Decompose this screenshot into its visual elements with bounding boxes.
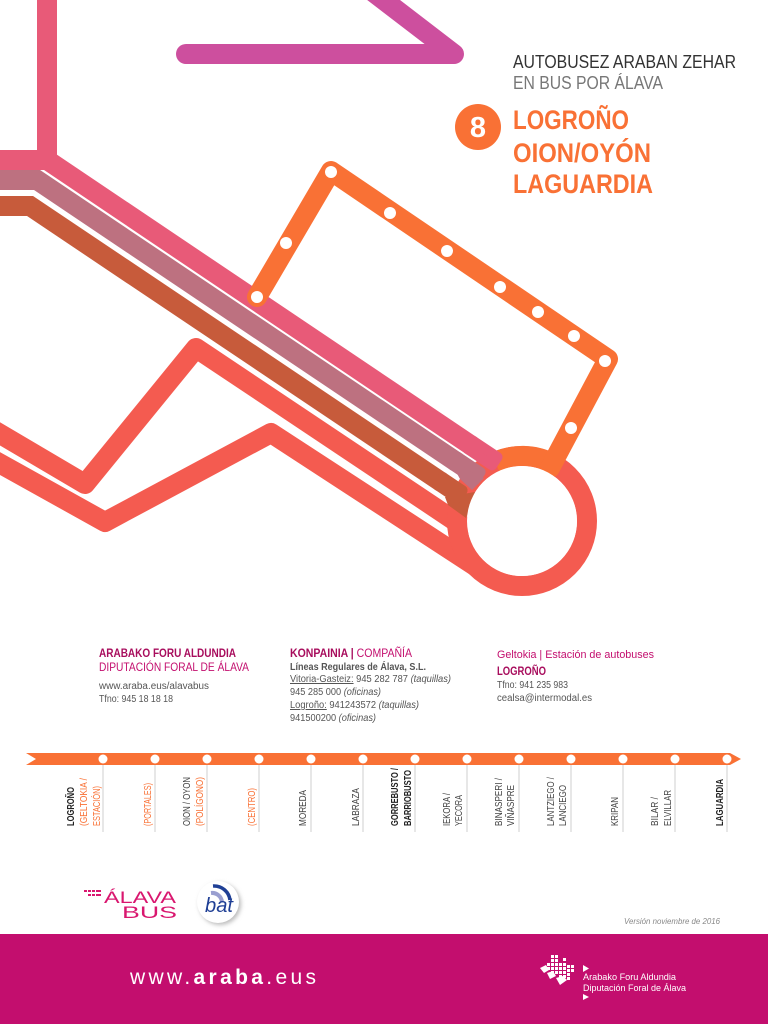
stop labels: (CENTRO) bbox=[246, 788, 258, 826]
line number badge: 8 bbox=[470, 112, 486, 144]
route: magenta line bbox=[186, 0, 454, 54]
contact: company: Líneas Regulares de Álava, S.L. bbox=[290, 660, 426, 673]
terminal ring orange arc bbox=[495, 456, 552, 463]
stop labels bbox=[64, 768, 726, 826]
timeline bbox=[26, 753, 741, 832]
contact: company: 941500200 (oficinas) bbox=[290, 713, 376, 724]
stop labels: OION / OYON bbox=[181, 777, 193, 826]
stop labels: (GELTOKIA / bbox=[78, 778, 90, 826]
contact: company: Logroño: 941243572 (taquillas) bbox=[290, 700, 419, 711]
route name: LOGROÑO bbox=[513, 104, 629, 135]
stop labels: YECORA bbox=[453, 795, 465, 826]
contact: Diputación: ARABAKO FORU ALDUNDIA bbox=[99, 646, 236, 660]
route name: OION/OYÓN bbox=[513, 137, 651, 168]
logo: Álava Bus bbox=[84, 888, 177, 922]
stop labels: BARRIOBUSTO bbox=[402, 770, 414, 826]
stop labels: KRIPAN bbox=[609, 797, 621, 826]
stop labels: ELVILLAR bbox=[662, 790, 674, 826]
title: Spanish line: EN BUS POR ÁLAVA bbox=[513, 73, 663, 93]
contact: station bbox=[497, 649, 654, 704]
contact: station: Tfno: 941 235 983 bbox=[497, 680, 568, 691]
terminal ring bbox=[457, 456, 587, 586]
contact: Diputación: Tfno: 945 18 18 18 bbox=[99, 694, 173, 705]
logo: Álava Bus: ÁLAVA bbox=[104, 888, 177, 907]
orange loop stops bbox=[251, 166, 611, 434]
route: red upper line bbox=[0, 348, 470, 531]
contact: Diputación bbox=[98, 646, 249, 705]
contact: station: cealsa@intermodal.es bbox=[497, 693, 592, 704]
footer band bbox=[0, 934, 768, 1024]
contact: company: KONPAINIA | COMPAÑÍA bbox=[290, 645, 412, 660]
stop labels: LABRAZA bbox=[350, 788, 362, 826]
contact: station: LOGROÑO bbox=[497, 663, 546, 678]
line number badge bbox=[455, 104, 501, 150]
stop labels: ESTACIÓN) bbox=[90, 786, 103, 826]
stop labels: LAGUARDIA bbox=[714, 779, 726, 826]
stop labels: LOGROÑO bbox=[64, 787, 77, 826]
contact: company: 945 285 000 (oficinas) bbox=[290, 687, 381, 698]
stop labels: MOREDA bbox=[297, 790, 309, 826]
logo: bat: bat bbox=[205, 895, 234, 917]
route name: LAGUARDIA bbox=[513, 169, 653, 199]
contact: Diputación: www.araba.eus/alavabus bbox=[98, 681, 209, 692]
footer website: www.araba.eus bbox=[129, 966, 316, 989]
route: orange loop bbox=[257, 171, 608, 468]
version note: Versión noviembre de 2016 bbox=[624, 916, 720, 926]
contact: company: Vitoria-Gasteiz: 945 282 787 (taquillas) bbox=[290, 674, 451, 685]
route name bbox=[513, 104, 653, 199]
stop labels: LANTZIEGO / bbox=[545, 777, 557, 826]
route: pink line bbox=[0, 0, 498, 465]
logo: Álava Bus: BUS bbox=[122, 903, 177, 922]
stop labels: BINASPERI / bbox=[493, 778, 505, 826]
stop labels: (PORTALES) bbox=[142, 783, 154, 826]
title block bbox=[455, 52, 736, 199]
contact: Diputación: DIPUTACIÓN FORAL DE ÁLAVA bbox=[99, 659, 249, 674]
stop labels: IEKORA / bbox=[441, 793, 453, 826]
timeline ticks bbox=[103, 760, 727, 832]
timeline arrow bbox=[26, 753, 741, 765]
logo: bat bbox=[197, 881, 241, 925]
timeline stops bbox=[98, 754, 732, 764]
stop labels: LANCIEGO bbox=[557, 785, 569, 826]
title: Basque line: AUTOBUSEZ ARABAN ZEHAR bbox=[513, 52, 736, 72]
footer logo mark bbox=[540, 955, 574, 985]
route: brown line bbox=[0, 206, 475, 518]
footer logo text bbox=[583, 965, 686, 1000]
contact: station: Geltokia | Estación de autobuses bbox=[497, 649, 654, 661]
terminal ring centre bbox=[467, 466, 577, 576]
footer logo text: Arabako Foru Aldundia bbox=[583, 972, 676, 982]
route: mauve line bbox=[0, 180, 484, 490]
stop labels: VIÑASPRE bbox=[504, 785, 517, 826]
footer logo text: Diputación Foral de Álava bbox=[583, 983, 686, 993]
route: red lower line bbox=[0, 433, 475, 566]
route map bbox=[0, 0, 611, 586]
stop labels: BILAR / bbox=[649, 797, 661, 826]
contact: company bbox=[290, 645, 451, 724]
stop labels: (POLÍGONO) bbox=[193, 777, 206, 826]
stop labels: GORREBUSTO / bbox=[389, 768, 401, 826]
